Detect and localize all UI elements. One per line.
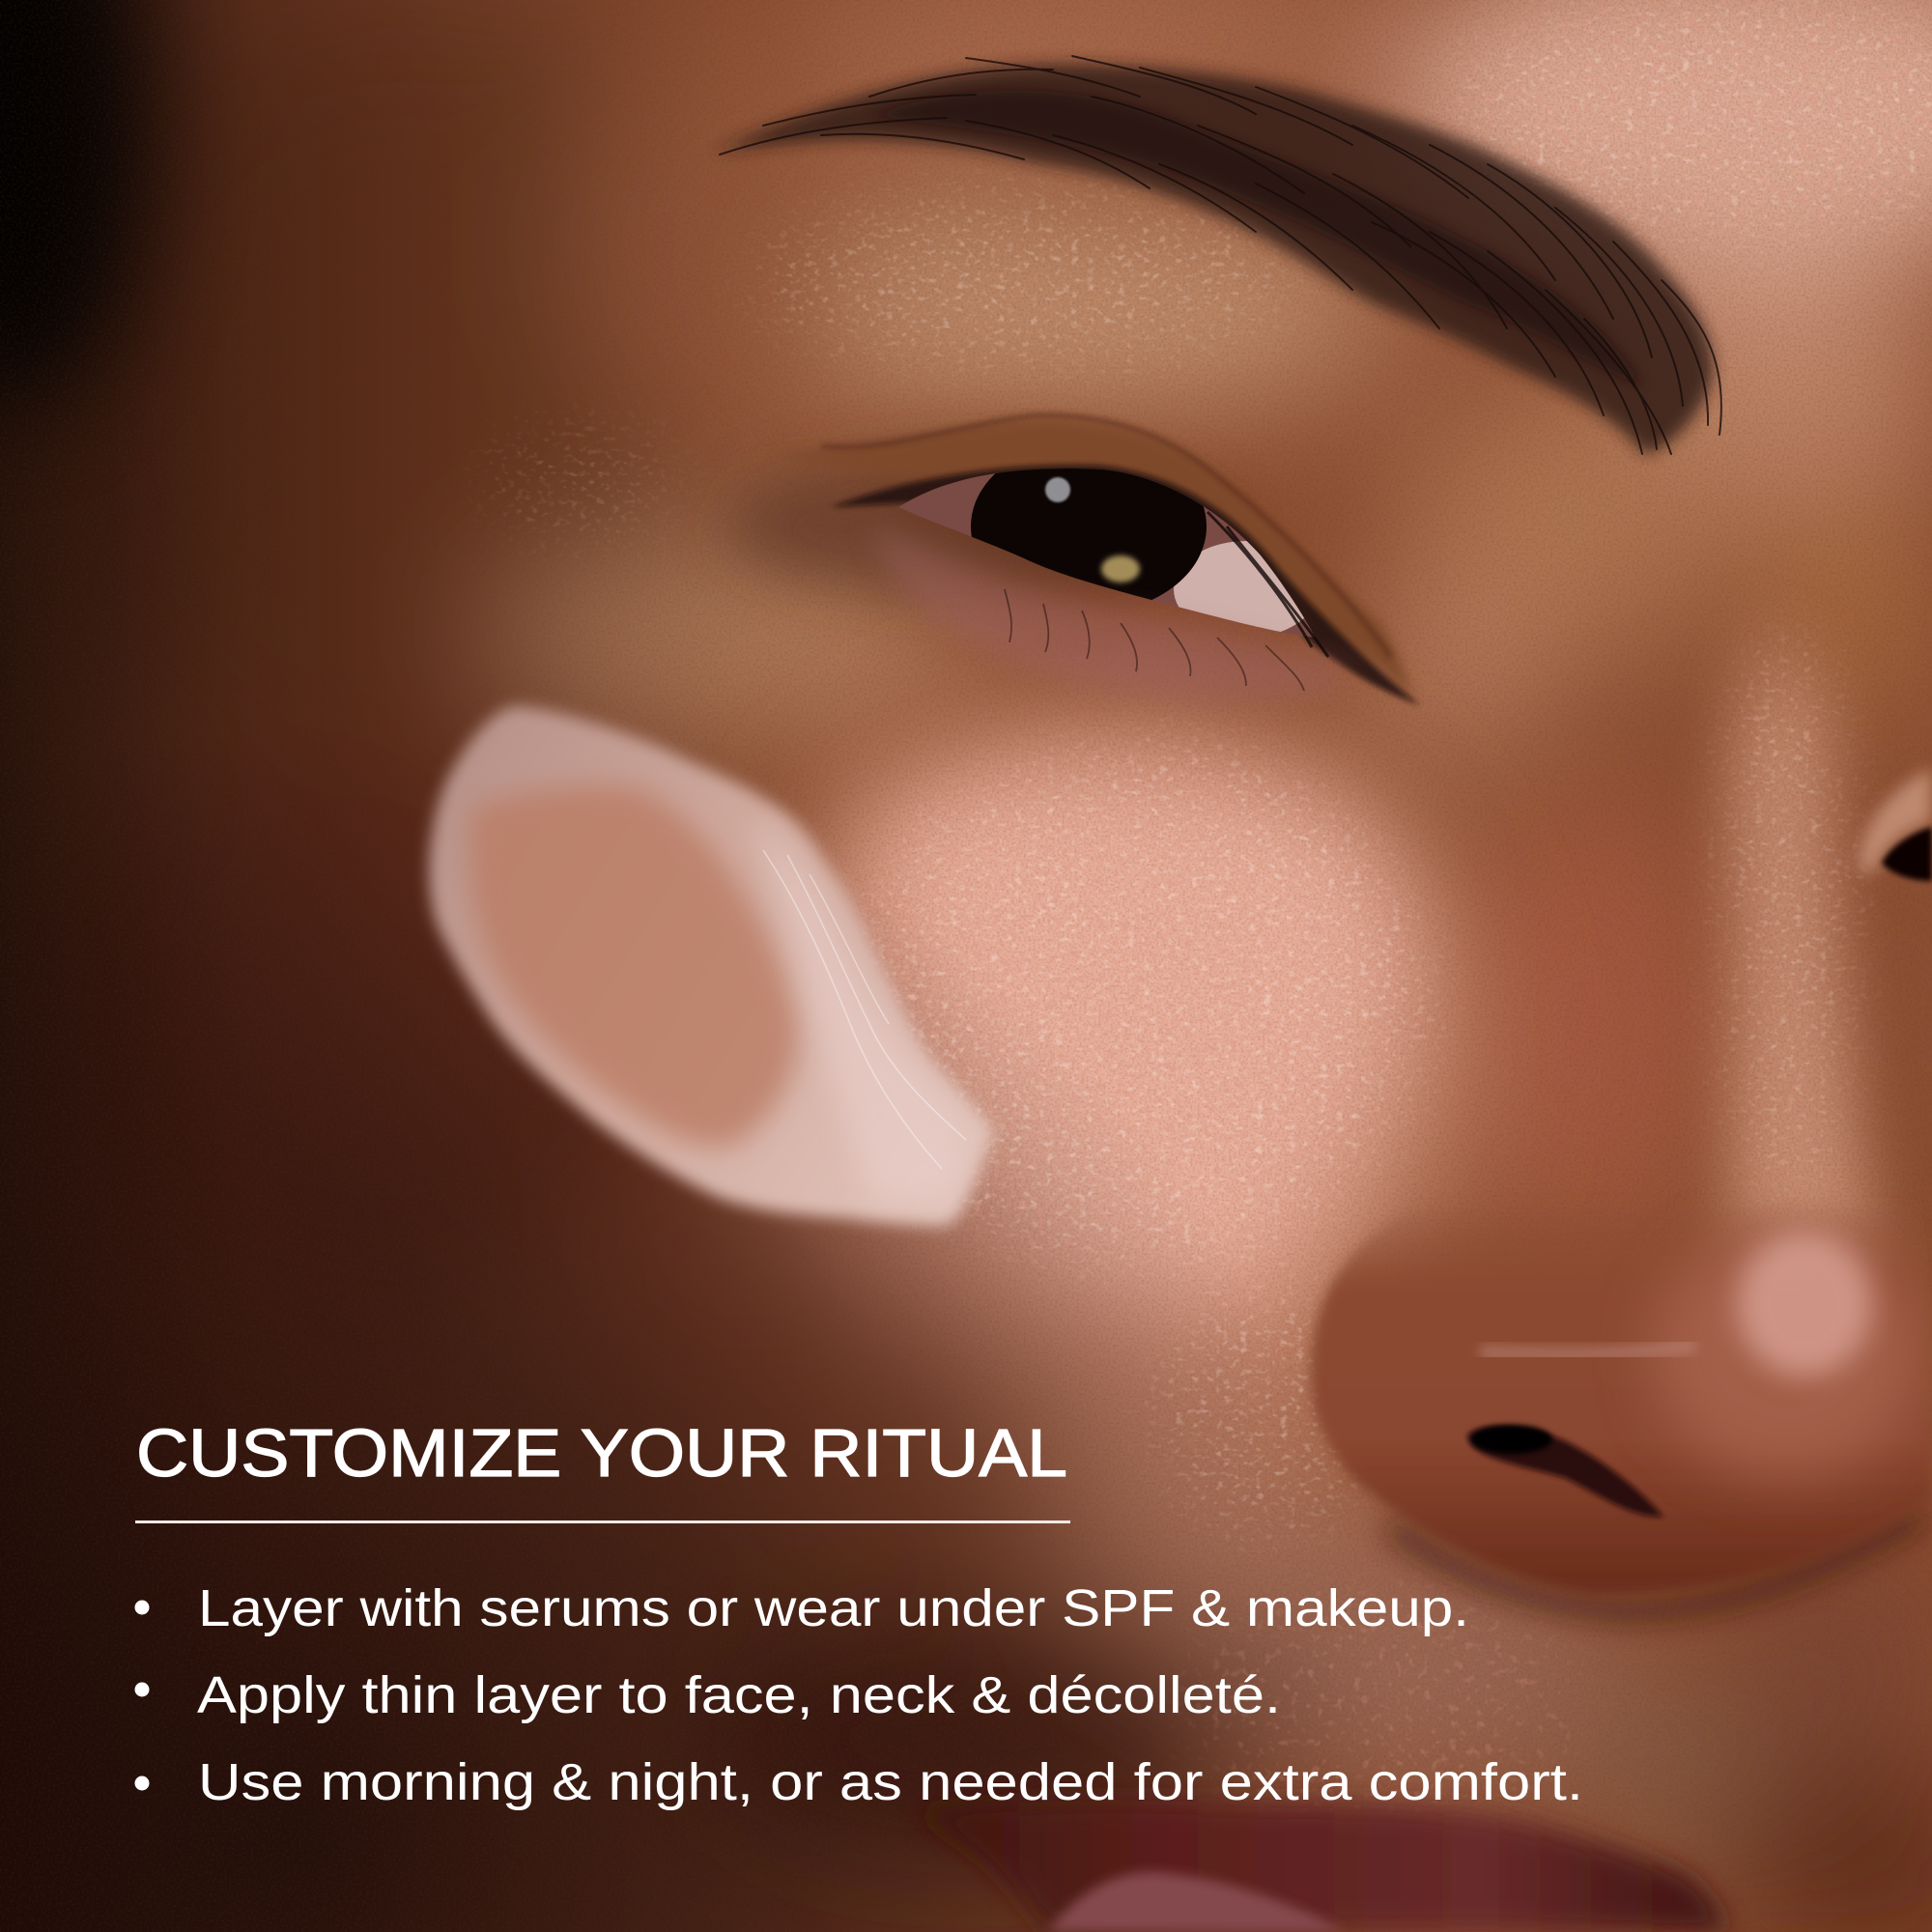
text block: customize your ritual: [135, 1415, 1583, 1811]
lower lashes: [1005, 589, 1304, 691]
far nostril: [1882, 827, 1932, 881]
eyelid crease shadow: [821, 415, 1391, 657]
nose wing: [1311, 1179, 1932, 1594]
eyebrow: [716, 56, 1721, 454]
dark pores on lit skin: [893, 2, 1929, 1797]
cream gloss lines: [763, 850, 966, 1169]
heading: CUSTOMIZE YOUR RITUAL: [136, 1415, 1067, 1491]
eyebrow mass: [716, 65, 1713, 454]
iris: [971, 440, 1207, 613]
eyeball with iris: [898, 469, 1316, 638]
lips: [912, 1801, 1729, 1932]
pupil reflection: [1101, 555, 1140, 582]
catchlight: [1045, 477, 1070, 502]
translucent rubbed-in centre: [469, 785, 798, 1147]
bright lit cheek: [869, 771, 1406, 1305]
nostril: [1467, 1427, 1663, 1517]
cheek outer glow: [753, 715, 1468, 1391]
bullet 2: Apply thin layer to face, neck & décolleté.: [197, 1666, 1281, 1724]
eye socket shadow: [724, 454, 1227, 599]
lash shadow: [831, 465, 1420, 705]
bullet 1: Layer with serums or wear under SPF & makeup.: [198, 1579, 1469, 1637]
glossy skin highlights: [485, 0, 1932, 1549]
nose tip glow: [1652, 1227, 1922, 1478]
upper outer lashes: [1208, 512, 1328, 657]
sclera: [1174, 541, 1319, 638]
cream swatch on cheek: [429, 706, 994, 1226]
far nose wing rim: [1860, 768, 1932, 874]
eye: [773, 415, 1420, 705]
nose bridge highlight: [1727, 599, 1879, 1380]
bullet 3: Use morning & night, or as needed for extra comfort.: [198, 1753, 1583, 1811]
nostril deep core: [1471, 1425, 1552, 1454]
heading rule: [135, 1520, 1070, 1523]
hair shadow top left corner: [0, 0, 145, 406]
upper lip: [912, 1801, 1729, 1932]
cream soft halo: [429, 706, 994, 1226]
nose: [1311, 768, 1932, 1611]
shadow under nose: [1391, 1517, 1922, 1611]
lower eyelid: [869, 526, 1352, 698]
nose tip highlight: [1737, 1232, 1872, 1377]
eyebrow hair strokes: [720, 56, 1721, 454]
eyebrow dense core: [869, 90, 1642, 386]
lower lip: [1048, 1872, 1345, 1932]
eyelid fold: [773, 419, 1414, 698]
cream bright ridge: [753, 821, 962, 1201]
nose wing highlight streak: [1480, 1345, 1695, 1354]
